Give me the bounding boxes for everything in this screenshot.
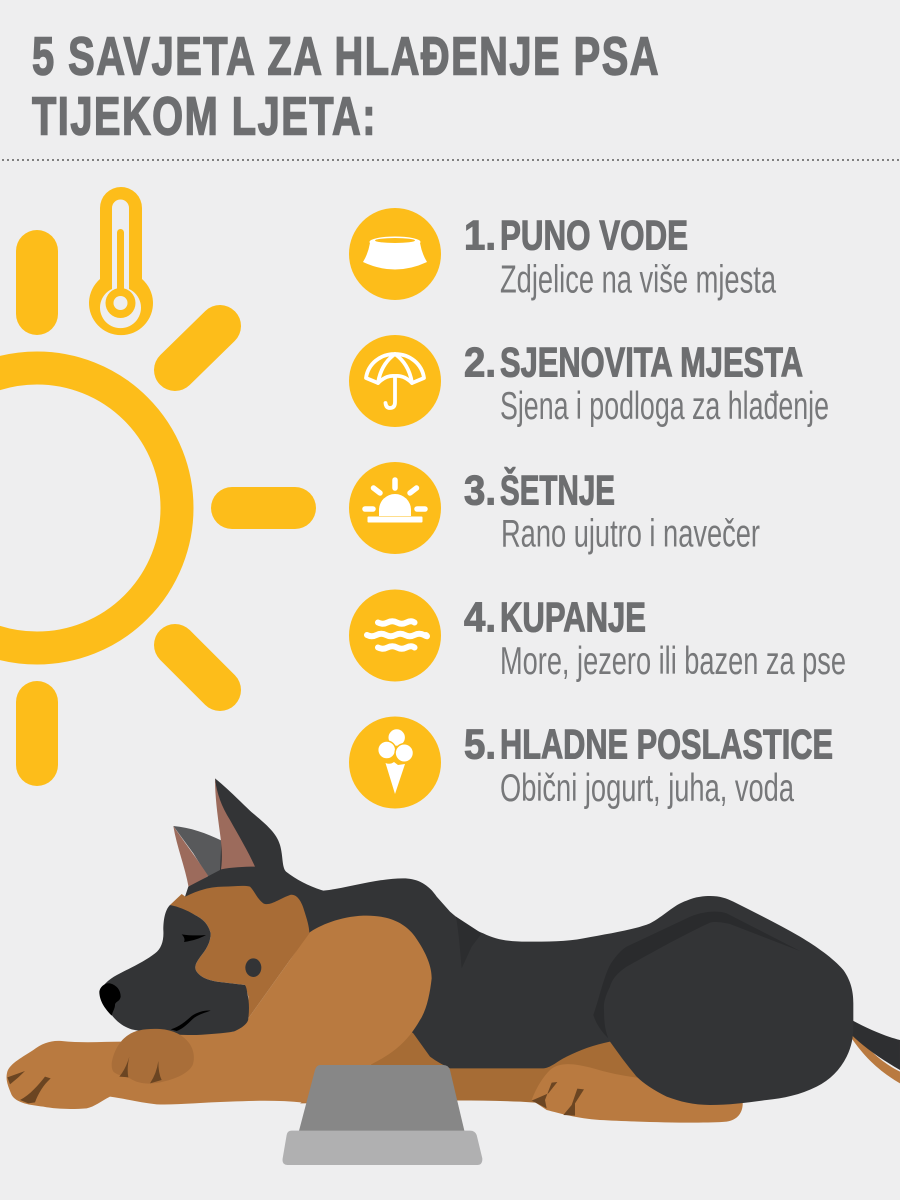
heading 1: PUNO VODE xyxy=(500,212,688,258)
title: TIJEKOM LJETA: xyxy=(32,86,377,146)
dog mouth xyxy=(171,1011,211,1031)
dog closed eye xyxy=(182,934,206,942)
title xyxy=(32,26,660,146)
dog haunch shading xyxy=(593,912,800,1038)
heading 2: 2. xyxy=(464,338,496,386)
item 5: hladne poslastice xyxy=(349,716,833,810)
heading 4: KUPANJE xyxy=(500,594,646,640)
heading 1: 1. xyxy=(464,212,496,258)
dog front ear inner xyxy=(215,778,255,869)
item 2: sjenovita mjesta xyxy=(349,335,829,428)
heading 4: 4. xyxy=(464,594,496,640)
dog body xyxy=(185,778,853,1105)
heading 2: SJENOVITA MJESTA xyxy=(500,338,803,386)
item 4: kupanje xyxy=(349,590,846,683)
icon: ice cream xyxy=(349,716,441,808)
heading 3: ŠETNJE xyxy=(500,466,615,514)
dog ear hole xyxy=(245,958,261,977)
illustration: sleeping dog xyxy=(7,778,900,1165)
icon: sun xyxy=(0,251,295,765)
title: 5 SAVJETA ZA HLAĐENJE PSA xyxy=(32,26,660,86)
icon: bowl xyxy=(349,208,441,300)
heading 4 xyxy=(464,594,646,640)
dog resting paw xyxy=(112,1029,194,1084)
icon: umbrella xyxy=(349,335,441,427)
dog rear foot xyxy=(532,1064,743,1123)
dog tail xyxy=(848,1020,900,1083)
heading 3 xyxy=(464,466,615,514)
description 3: Rano ujutro i navečer xyxy=(501,512,760,556)
item 3: setnje xyxy=(349,462,760,556)
icon: sunrise xyxy=(349,462,441,554)
dog back ear xyxy=(173,826,222,887)
dog head xyxy=(99,886,309,1035)
dog front arm xyxy=(7,916,450,1109)
icon: thermometer xyxy=(89,187,153,335)
heading 5: 5. xyxy=(464,720,496,768)
icon: waves xyxy=(349,590,441,682)
heading 3: 3. xyxy=(464,466,496,514)
item 1: puno vode xyxy=(349,208,776,302)
heading 2 xyxy=(464,338,803,386)
water bowl xyxy=(283,1065,482,1165)
dog nose xyxy=(99,983,121,1016)
dog belly xyxy=(300,1030,650,1103)
dog back shading xyxy=(456,917,482,968)
description 1: Zdjelice na više mjesta xyxy=(500,258,776,302)
heading 1 xyxy=(464,212,688,258)
